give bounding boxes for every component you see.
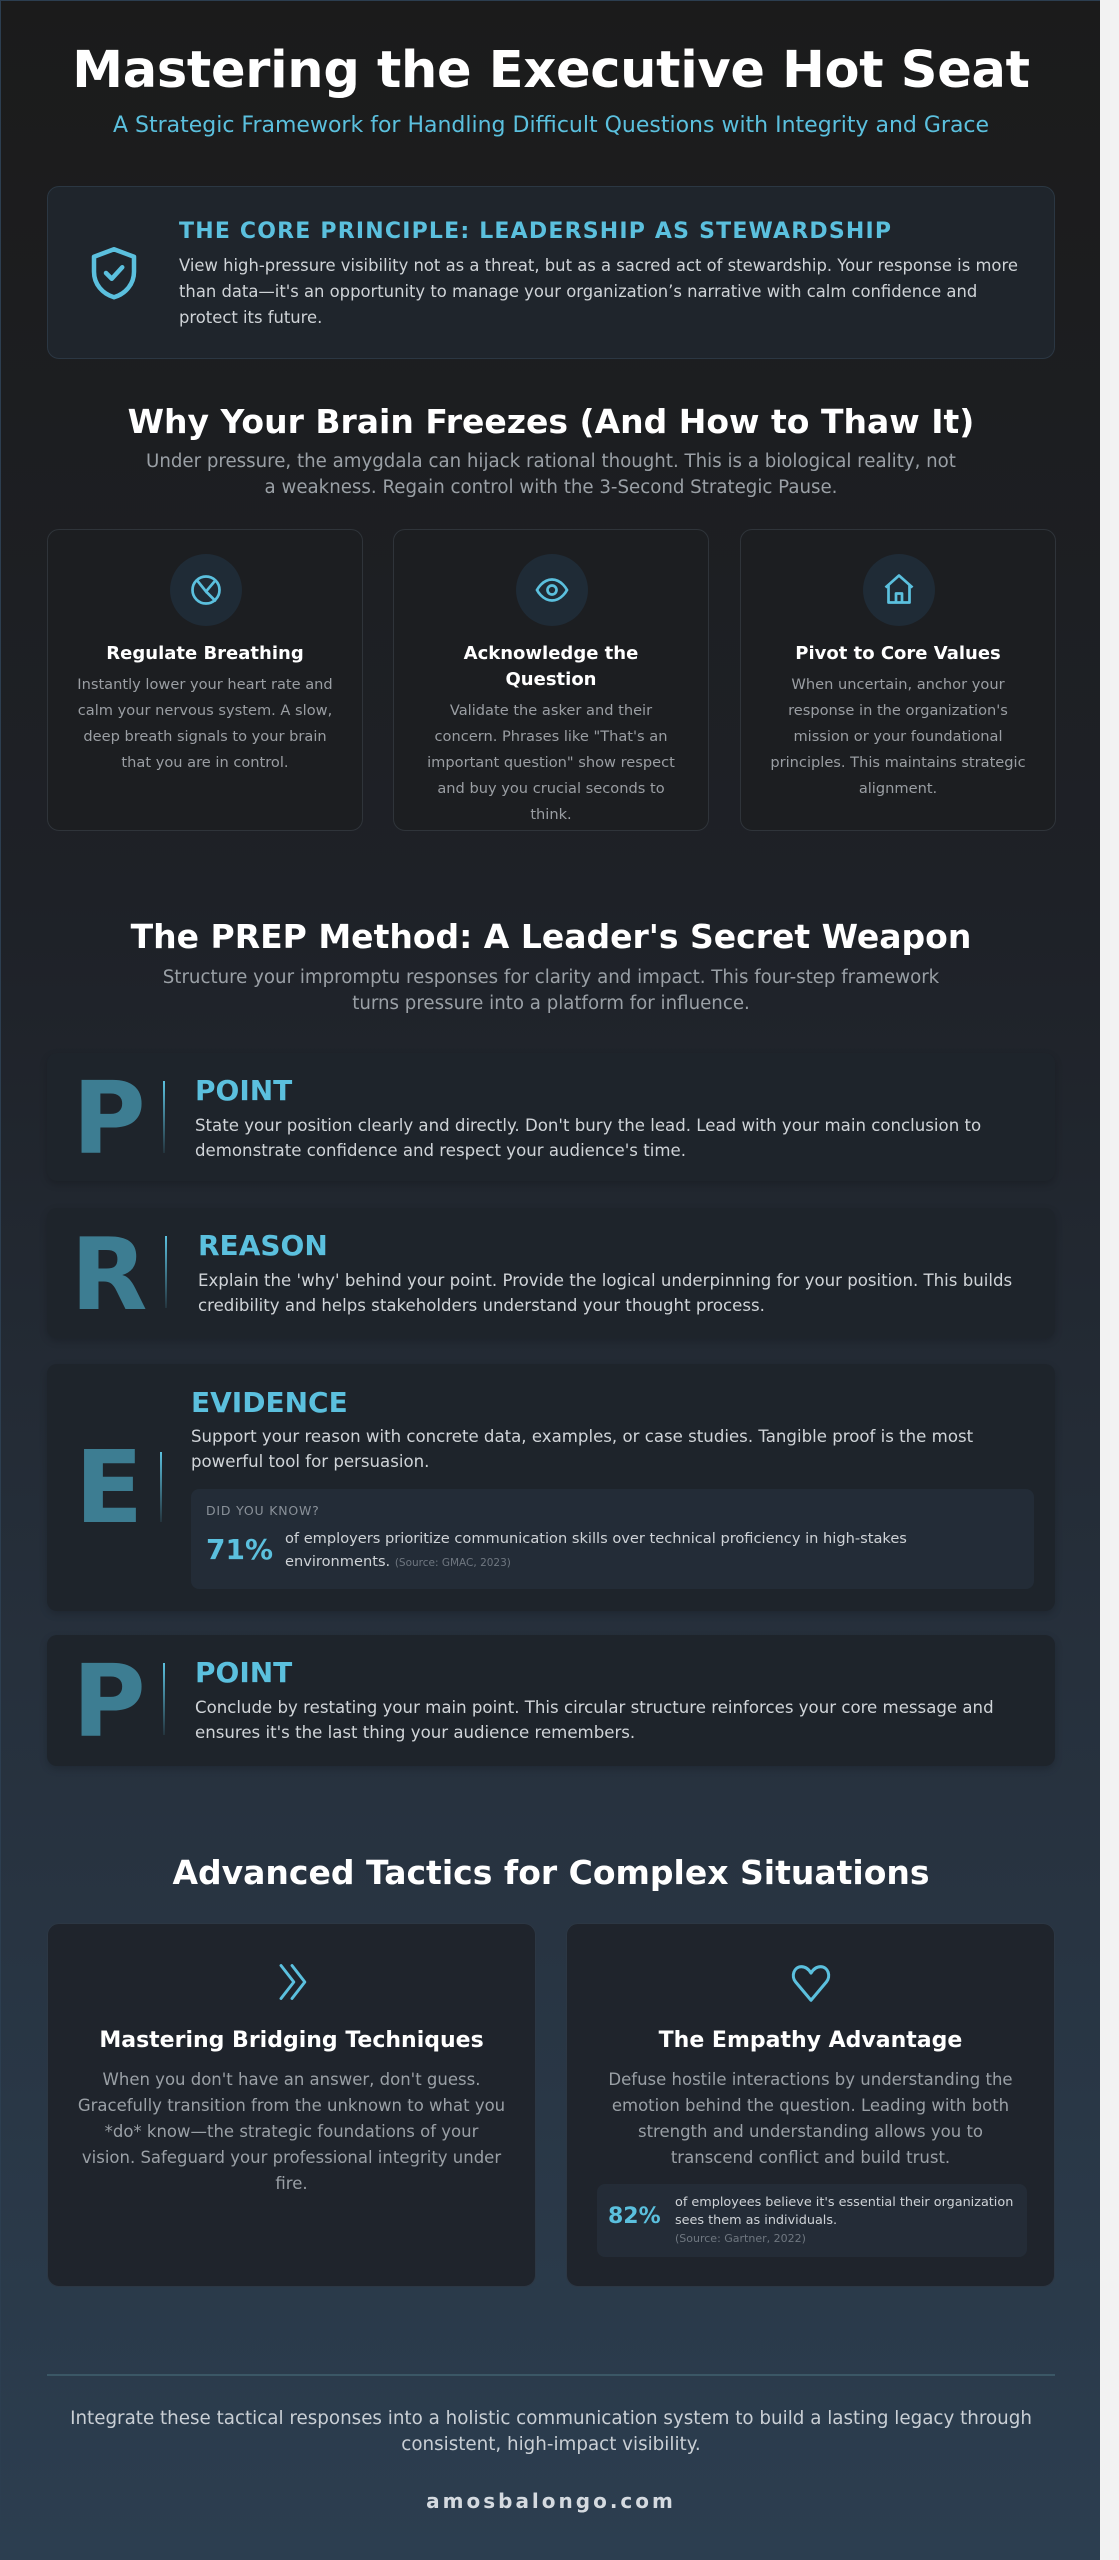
subtext: a weakness. Regain control with the 3-Second Strategic Pause.	[265, 477, 837, 498]
text: Instantly lower your heart rate and	[77, 676, 333, 693]
callout: stat 82%: sees them as individuals.	[675, 2213, 837, 2228]
stat 71%: 71%	[206, 1533, 273, 1566]
body text: protect its future.	[179, 308, 322, 327]
text: powerful tool for persuasion.	[191, 1452, 429, 1471]
panel: pivot	[740, 529, 1056, 831]
letter R: R	[70, 1216, 148, 1333]
text: Support your reason with concrete data, examples, or case studies. Tangible proof is the most	[191, 1427, 973, 1446]
title: Acknowledge the	[464, 643, 638, 664]
text	[770, 676, 1026, 797]
text: When uncertain, anchor your	[791, 676, 1005, 693]
icon: chevrons	[280, 1964, 306, 2000]
panel: P point again	[47, 1635, 1055, 1766]
heading: THE CORE PRINCIPLE: LEADERSHIP AS STEWARDSHIP	[179, 219, 892, 244]
text: When you don't have an answer, don't guess.	[103, 2070, 480, 2089]
heading: POINT	[195, 1656, 292, 1689]
title: The Empathy Advantage	[659, 2028, 962, 2053]
text: response in the organization's	[788, 702, 1008, 719]
text: emotion behind the question. Leading with both	[612, 2096, 1009, 2115]
letter P: P	[72, 1060, 146, 1177]
text: strength and understanding allows you to	[638, 2122, 983, 2141]
subtext: Structure your impromptu responses for clarity and impact. This four-step framework	[163, 967, 939, 988]
callout: did you know: of employers prioritize communication skills over technical proficiency in high-stakes	[285, 1530, 907, 1547]
text: important question" show respect	[427, 754, 675, 771]
callout: did you know: DID YOU KNOW?	[206, 1503, 320, 1518]
text	[78, 2070, 505, 2193]
text: Conclude by restating your main point. This circular structure reinforces your core message and	[195, 1698, 994, 1717]
text: Validate the asker and their	[450, 702, 652, 719]
subtext	[163, 967, 939, 1014]
subtitle: A Strategic Framework for Handling Difficult Questions with Integrity and Grace	[113, 113, 989, 138]
callout: stat 82%: 82%	[608, 2204, 661, 2229]
text: ensures it's the last thing your audience remembers.	[195, 1723, 635, 1742]
text	[195, 1116, 981, 1160]
icon: shield check	[92, 247, 136, 300]
footer text: consistent, high-impact visibility.	[401, 2434, 701, 2455]
text	[198, 1271, 1012, 1315]
callout: stat 82%: (Source: Gartner, 2022)	[675, 2232, 806, 2245]
body text: than data—it's an opportunity to manage your organization’s narrative with calm confidence and	[179, 282, 977, 301]
icon: breathing	[170, 554, 242, 626]
heading: advanced tactics: Advanced Tactics for Complex Situations	[172, 1853, 930, 1892]
text: credibility and helps stakeholders understand your thought process.	[198, 1296, 765, 1315]
body text: View high-pressure visibility not as a threat, but as a sacred act of stewardship. Your response is more	[179, 256, 1018, 275]
heading: PREP: The PREP Method: A Leader's Secret Weapon	[131, 917, 971, 956]
text: alignment.	[859, 780, 937, 797]
text: concern. Phrases like "That's an	[435, 728, 667, 745]
text: *do* know—the strategic foundations of your	[105, 2122, 478, 2141]
text: deep breath signals to your brain	[83, 728, 327, 745]
text: Defuse hostile interactions by understanding the	[608, 2070, 1013, 2089]
body text	[179, 256, 1018, 327]
icon: eye	[516, 554, 588, 626]
title	[464, 643, 638, 690]
title: Mastering the Executive Hot Seat	[72, 41, 1030, 100]
title: Regulate Breathing	[106, 643, 304, 664]
text	[77, 676, 333, 771]
heading: POINT	[195, 1074, 292, 1107]
text: principles. This maintains strategic	[770, 754, 1026, 771]
title: Mastering Bridging Techniques	[99, 2028, 484, 2053]
callout: stat 82%	[597, 2184, 1027, 2257]
text: State your position clearly and directly. Don't bury the lead. Lead with your main conclusion to	[195, 1116, 981, 1135]
icon: heart	[792, 1965, 830, 2002]
panel: bridging	[47, 1923, 536, 2287]
text	[427, 702, 675, 823]
text: that you are in control.	[121, 754, 289, 771]
heading: EVIDENCE	[191, 1386, 348, 1419]
heading: brain freezes: Why Your Brain Freezes (And How to Thaw It)	[128, 402, 974, 441]
heading: REASON	[198, 1229, 328, 1262]
footer domain: amosbalongo.com	[426, 2489, 676, 2513]
subtext	[146, 451, 956, 498]
text	[608, 2070, 1013, 2167]
subtext: Under pressure, the amygdala can hijack rational thought. This is a biological reality, not	[146, 451, 956, 472]
text: vision. Safeguard your professional integrity under	[82, 2148, 501, 2167]
text: Explain the 'why' behind your point. Provide the logical underpinning for your position. This builds	[198, 1271, 1012, 1290]
callout: stat 82%: of employees believe it's essential their organization	[675, 2195, 1013, 2210]
callout: did you know: environments. (Source: GMAC, 2023)	[285, 1553, 511, 1570]
footer text: Integrate these tactical responses into a holistic communication system to build a lasting legacy through	[70, 2408, 1032, 2429]
icon: house	[863, 554, 935, 626]
text: transcend conflict and build trust.	[671, 2148, 950, 2167]
title: Question	[506, 669, 596, 690]
panel: E evidence	[47, 1364, 1055, 1611]
panel: P point	[47, 1053, 1055, 1181]
letter E: E	[75, 1429, 143, 1546]
panel: regulate breathing	[47, 529, 363, 831]
text: and buy you crucial seconds to	[437, 780, 665, 797]
panel: acknowledge	[393, 529, 709, 831]
text: Gracefully transition from the unknown to what you	[78, 2096, 505, 2115]
panel: empathy	[566, 1923, 1055, 2287]
subtext: turns pressure into a platform for influence.	[352, 993, 750, 1014]
footer text	[70, 2408, 1032, 2455]
callout: did you know	[191, 1489, 1034, 1589]
panel: R reason	[47, 1208, 1055, 1338]
letter P: P	[72, 1643, 146, 1760]
title: Pivot to Core Values	[795, 643, 1001, 664]
text: demonstrate confidence and respect your audience's time.	[195, 1141, 686, 1160]
text	[191, 1427, 973, 1471]
text: calm your nervous system. A slow,	[78, 702, 332, 719]
text	[195, 1698, 994, 1742]
text: mission or your foundational	[793, 728, 1003, 745]
text: fire.	[275, 2174, 308, 2193]
text: think.	[530, 806, 572, 823]
panel: core principle	[47, 186, 1055, 359]
